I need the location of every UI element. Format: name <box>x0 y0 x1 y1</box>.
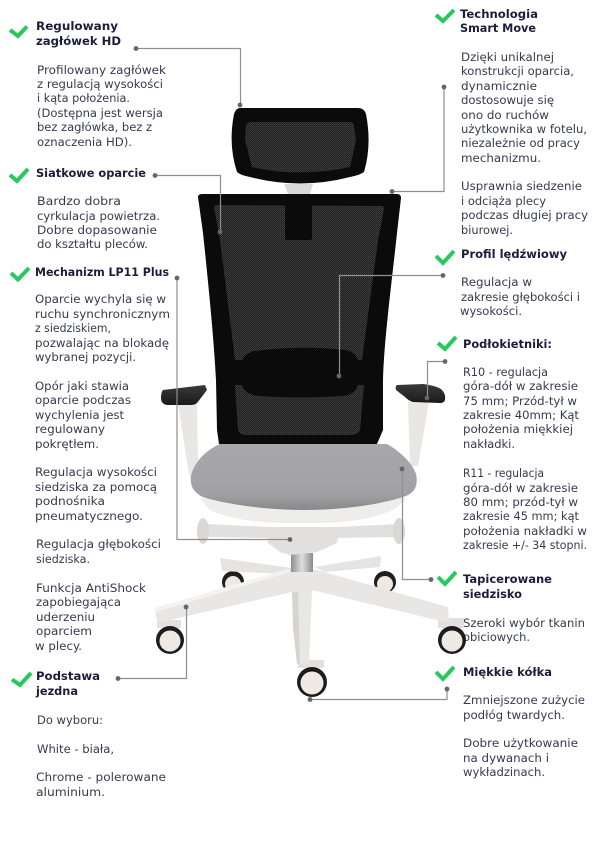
body text: z siedziskiem, <box>35 321 111 335</box>
body text: podczas długiej pracy <box>461 208 588 222</box>
body text: użytkownika w fotelu, <box>461 122 587 136</box>
body text: zakresie 40mm; Kąt <box>463 408 580 422</box>
heading: zagłówek HD <box>36 34 121 48</box>
feature: armrests <box>438 337 587 552</box>
connector: armrests <box>425 359 447 400</box>
feature: lumbar profile <box>436 247 580 318</box>
connector: mesh back <box>153 173 222 234</box>
check icon <box>11 268 29 280</box>
body text: wysokości. <box>460 304 522 318</box>
connector: upholstery <box>400 467 433 582</box>
body text: siedziska. <box>36 552 90 566</box>
chair illustration <box>155 108 466 697</box>
body text: wykładzinach. <box>463 765 545 779</box>
feature: base <box>12 669 166 799</box>
seat mechanism <box>197 518 405 555</box>
heading <box>463 572 552 601</box>
heading: Profil lędźwiowy <box>461 247 568 261</box>
body text: góra-dół w zakresie <box>463 379 578 393</box>
body text: aluminium. <box>36 785 105 799</box>
body text: Opór jaki stawia <box>35 379 129 393</box>
body text: zakresie 45 mm; kąt <box>463 509 580 523</box>
body text: biurowej. <box>461 223 513 237</box>
feature: upholstered seat <box>438 572 585 644</box>
heading: Podstawa <box>36 669 100 683</box>
caster: rear right <box>374 571 396 593</box>
check icon <box>10 169 28 181</box>
heading: Mechanizm LP11 Plus <box>35 265 169 279</box>
feature: smart move <box>436 7 588 237</box>
body text: na dywanach i <box>463 751 549 765</box>
body text: uderzeniu <box>36 610 95 624</box>
body text: R11 - regulacja <box>463 466 544 480</box>
armrest pad: left <box>161 385 207 405</box>
body text: oparcie podczas <box>35 393 131 407</box>
body text: niezależnie od pracy <box>461 136 580 150</box>
heading: siedzisko <box>463 587 522 601</box>
body text: Funkcja AntiShock <box>36 581 146 595</box>
heading: Siatkowe oparcie <box>36 166 146 180</box>
heading: jezdna <box>35 684 78 698</box>
headrest <box>232 108 369 184</box>
body text: położenia nakładki w <box>463 524 587 538</box>
body text: Chrome - polerowane <box>36 770 166 784</box>
body text: Profilowany zagłówek <box>37 63 166 77</box>
heading <box>460 7 538 35</box>
body text: 75 mm; Przód-tył w <box>463 394 577 408</box>
body text: Usprawnia siedzenie <box>461 179 582 193</box>
body text: Regulacja wysokości <box>35 465 157 479</box>
check icon <box>438 337 456 349</box>
connector: wheels <box>308 687 449 702</box>
body text: z regulacją wysokości <box>37 77 163 91</box>
body text <box>37 194 160 251</box>
body text: góra-dół w zakresie <box>463 481 578 495</box>
body text: mechanizmu. <box>461 151 541 165</box>
body text: White - biała, <box>37 742 114 756</box>
heading: Smart Move <box>460 21 536 35</box>
body text: położenia miękkiej <box>463 422 573 436</box>
connector: headrest <box>134 46 242 107</box>
body text: Szeroki wybór tkanin <box>463 616 585 630</box>
heading: Regulowany <box>36 19 119 33</box>
body text: cyrkulacja powietrza. <box>37 209 160 223</box>
stems of front casters <box>157 618 464 668</box>
body text: zakresie głębokości i <box>461 290 580 304</box>
headrest bracket <box>284 184 313 194</box>
connector: lumbar <box>337 273 445 378</box>
body text: dostosowuje się <box>461 93 554 107</box>
armrest supports <box>178 402 429 478</box>
rear legs <box>220 556 381 574</box>
body text: R10 - regulacja <box>463 365 548 379</box>
seat cushion <box>191 444 417 510</box>
body text: Dobre użytkowanie <box>463 736 578 750</box>
body text: bez zagłówka, bez z <box>37 120 152 134</box>
body text: siedziska za pomocą <box>35 480 157 494</box>
body text: Oparcie wychyla się w <box>35 292 166 306</box>
caster: rear left <box>222 571 244 593</box>
body text <box>463 616 585 644</box>
caster: front right <box>438 626 466 654</box>
heading: Podłokietniki: <box>463 337 552 351</box>
check icon <box>436 10 454 21</box>
body text: pokrętłem. <box>35 437 99 451</box>
body text: wybranej pozycji. <box>35 350 136 364</box>
body text: Dobre dopasowanie <box>37 223 157 237</box>
feature: adjustable headrest <box>10 19 166 149</box>
armrest pad: right <box>396 384 445 403</box>
body text: ono do ruchów <box>461 108 549 122</box>
backrest <box>198 194 401 444</box>
body text: 80 mm; przód-tył w <box>463 495 578 509</box>
body text: obiciowych. <box>463 630 530 644</box>
body text: ruchu synchronicznym <box>35 307 170 321</box>
body text <box>460 275 580 318</box>
body text <box>37 63 166 149</box>
heading: Technologia <box>460 7 538 21</box>
body text: oparciem <box>36 624 92 638</box>
body text: Zmniejszone zużycie <box>463 693 585 707</box>
body text: Do wyboru: <box>37 713 103 727</box>
body text <box>36 713 166 799</box>
feature: soft wheels <box>436 665 585 779</box>
body text <box>461 50 588 237</box>
body text: wychylenia jest <box>35 408 125 422</box>
heading: Tapicerowane <box>463 572 552 586</box>
body text: konstrukcji oparcia, <box>461 64 574 78</box>
body text: i kąta położenia. <box>37 91 130 105</box>
body text: Bardzo dobra <box>37 194 121 208</box>
check icon <box>436 667 454 679</box>
body text: zapobiegająca <box>36 595 121 609</box>
connector: smart move <box>390 85 446 194</box>
body text: pneumatycznego. <box>35 509 143 523</box>
body text: pozwalając na blokadę <box>35 336 169 350</box>
lumbar support <box>241 348 358 398</box>
body text: oznaczenia HD). <box>37 135 132 149</box>
body text: zakresie +/- 34 stopni. <box>463 538 587 552</box>
feature: mechanism <box>11 265 170 653</box>
body text: podnośnika <box>35 494 105 508</box>
heading <box>36 19 121 48</box>
check icon <box>436 251 454 263</box>
check icon <box>438 572 456 584</box>
body text: do kształtu pleców. <box>37 237 148 251</box>
gas cylinder <box>291 553 313 572</box>
seat shell <box>200 498 407 523</box>
body text: dynamicznie <box>461 79 537 93</box>
caster: front center <box>297 667 327 697</box>
body text: w plecy. <box>35 639 82 653</box>
body text: i odciąża plecy <box>461 194 546 208</box>
body text: Regulacja głębokości <box>36 537 161 551</box>
backrest strap <box>285 194 312 240</box>
heading: Miękkie kółka <box>463 665 552 679</box>
feature: mesh back <box>10 166 160 251</box>
connector: mechanism <box>175 276 292 542</box>
heading <box>35 669 100 698</box>
body text: regulowany <box>35 422 105 436</box>
body text <box>35 292 170 653</box>
chair base <box>155 556 466 697</box>
body text: podłóg twardych. <box>463 708 565 722</box>
body text: nakładki. <box>463 437 515 451</box>
body text: Regulacja w <box>461 275 532 289</box>
connector: base <box>116 605 188 681</box>
front legs <box>155 569 449 664</box>
body text <box>463 365 587 552</box>
body text: (Dostępna jest wersja <box>37 106 163 120</box>
body text: Dzięki unikalnej <box>461 50 554 64</box>
check icon <box>12 673 31 685</box>
body text <box>463 693 585 779</box>
check icon <box>10 26 27 36</box>
caster: front left <box>156 626 184 654</box>
